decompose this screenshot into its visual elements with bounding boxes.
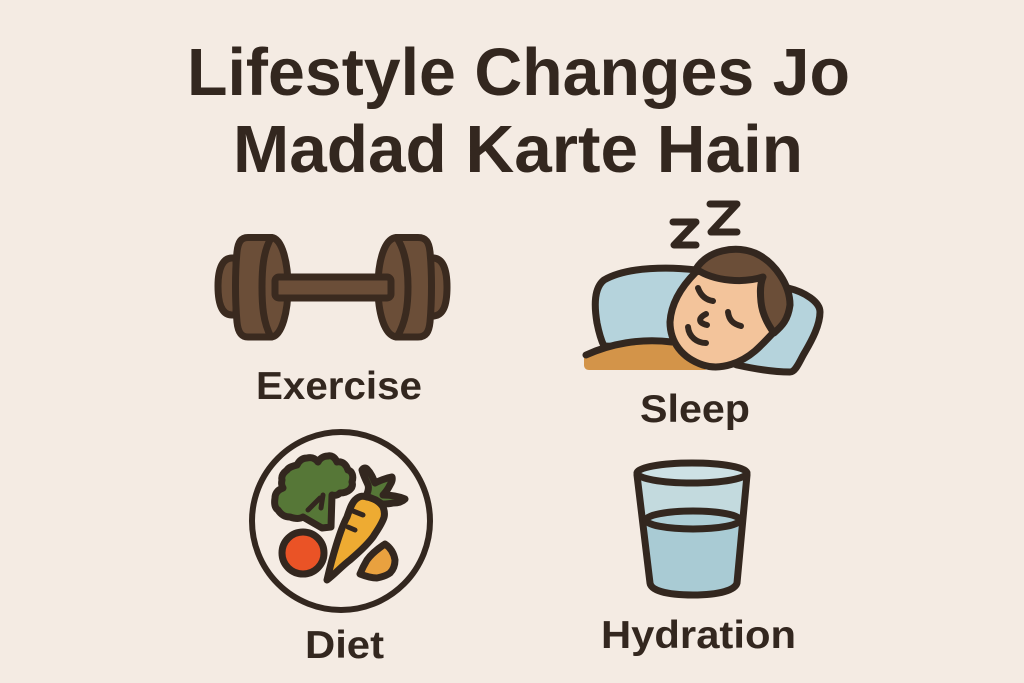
icon: sleeping person bbox=[584, 204, 820, 372]
hair bbox=[696, 249, 790, 333]
pillow bbox=[595, 268, 820, 372]
broccoli bbox=[275, 456, 353, 528]
title: Lifestyle Changes Jo bbox=[187, 35, 850, 110]
label: Hydration: Hydration bbox=[601, 614, 796, 657]
orange wedge bbox=[360, 544, 395, 578]
carrot leaves bbox=[362, 468, 405, 504]
eyes, nose and mouth bbox=[688, 288, 741, 343]
plate bbox=[252, 432, 430, 610]
label: Exercise: Exercise bbox=[256, 365, 422, 408]
label: Diet: Diet bbox=[305, 624, 384, 667]
icon: dumbbell bbox=[218, 238, 447, 337]
z letters bbox=[673, 204, 737, 245]
face bbox=[670, 262, 774, 367]
icon: plate of vegetables bbox=[252, 432, 430, 610]
label: Sleep: Sleep bbox=[640, 388, 750, 431]
title bbox=[187, 35, 850, 187]
carrot bbox=[327, 496, 384, 580]
title: Madad Karte Hain bbox=[233, 112, 803, 187]
blanket bbox=[584, 341, 706, 370]
tomato bbox=[282, 532, 324, 574]
icon: glass of water bbox=[637, 463, 747, 595]
